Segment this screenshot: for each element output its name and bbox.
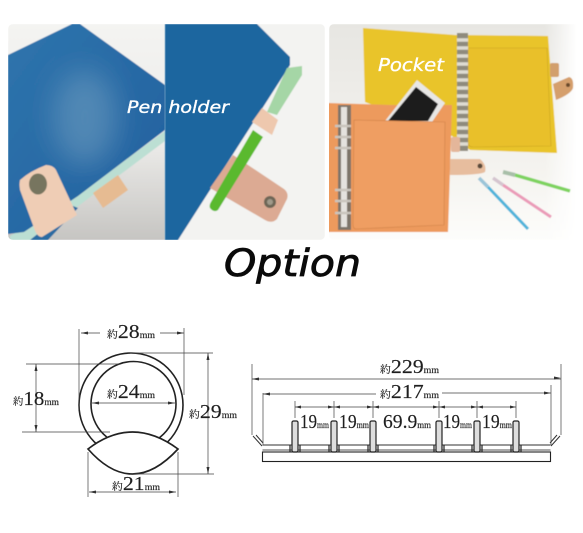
panel: pen holder photos: [8, 24, 325, 240]
pens: [515, 175, 570, 191]
label: 18mm: 約18mm: [13, 388, 59, 410]
label: 28mm: 約28mm: [107, 321, 155, 343]
phone: [385, 80, 445, 122]
end tabs: [253, 435, 560, 446]
dimension arrowheads: [252, 376, 561, 408]
photo: blue cover with closure strap: [8, 24, 165, 240]
label: 21mm: 約21mm: [112, 473, 160, 495]
dimension lines: [22, 328, 214, 497]
orange organizer straps: [451, 137, 460, 152]
label: 24mm: 約24mm: [107, 381, 155, 403]
diagram: ring cross-section dimensions: [22, 328, 214, 497]
lens-shaped base: [88, 432, 178, 474]
orange pocket: [353, 120, 445, 229]
label: 29mm: 約29mm: [189, 401, 237, 423]
orange organizer: [328, 103, 452, 232]
base plate: [262, 452, 550, 462]
pins: [292, 421, 519, 452]
label: Pocket: Pocket: [378, 55, 445, 76]
label background: 24mm: [105, 385, 157, 400]
orange organizer rings: [338, 105, 351, 230]
photo background: [329, 24, 583, 240]
label: 69.9mm spacing: 69.9mm: [383, 411, 431, 433]
dimension lines: [252, 364, 561, 445]
label: 229mm: 約229 mm: [380, 356, 439, 378]
dimension arrowheads: [34, 332, 210, 494]
inner ring: [91, 362, 176, 446]
photo: pen held by leather loop: [165, 24, 325, 240]
yellow organizer straps: [550, 63, 559, 77]
heading: Option: Option: [224, 242, 361, 285]
label: 19mm spacing 4: 19mm: [482, 411, 512, 433]
outer ring: [79, 353, 183, 457]
panel: pocket photo: [328, 24, 583, 240]
label background: 217mm: [377, 385, 441, 400]
yellow organizer: [363, 28, 557, 153]
pin feet: [290, 445, 521, 452]
yellow organizer rings: [457, 33, 468, 151]
diagram: ring mechanism side view: [252, 364, 561, 462]
label: 19mm spacing 1: 19mm: [300, 411, 329, 433]
label: Pen holder: Pen holder: [127, 98, 230, 118]
label: 19mm spacing 3: 19mm: [443, 411, 472, 433]
label: 217mm: 約217 mm: [380, 381, 439, 403]
label: 19mm spacing 2: 19mm: [339, 411, 369, 433]
